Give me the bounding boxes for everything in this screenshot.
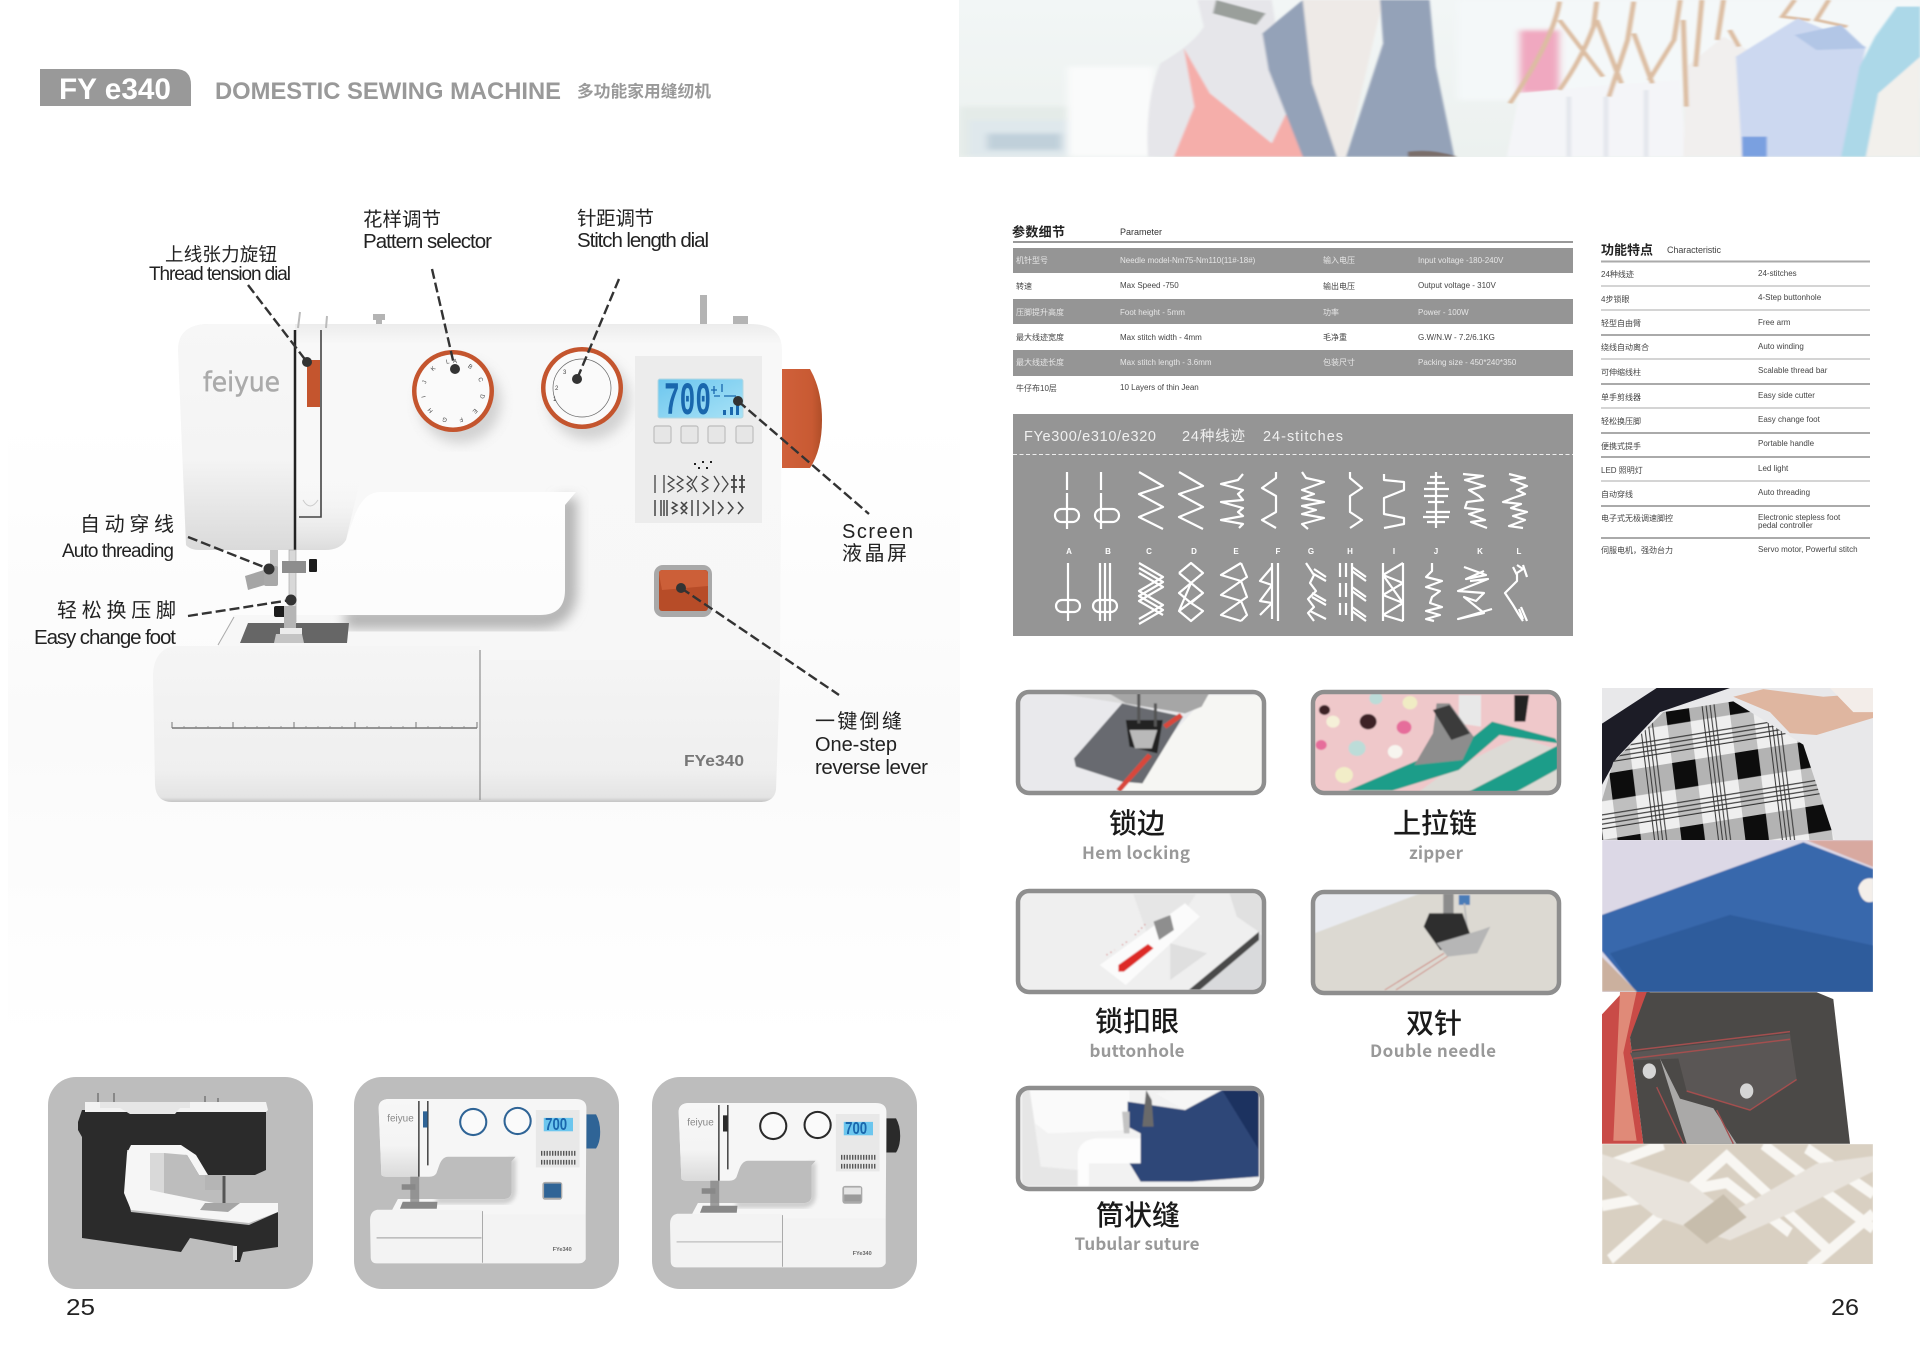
row: needle: 输入电压 [1323,255,1355,265]
row: stitch length: 包装尺寸 [1323,357,1355,367]
black shell [78,1110,278,1262]
row: foot height: Foot height - 5mm [1120,308,1185,317]
parameter table [1012,224,1573,393]
row: stitch width: 最大线迹宽度 [1016,332,1064,342]
characteristics rows: 24种线迹 [1601,269,1634,279]
lcd status icons [711,384,736,396]
characteristics rows: 伺服电机，强劲台力 [1601,545,1673,555]
characteristics rows: Easy side cutter [1758,391,1815,400]
caption: buttonhole: buttonhole [1090,1037,1185,1062]
blue shirts [1736,18,1866,157]
callout: auto threading: 自动穿线 [80,513,174,536]
characteristics heading: 功能特点 [1601,242,1653,258]
photo: blue fabric [1602,840,1873,993]
characteristics rows: 4-Step buttonhole [1758,293,1822,302]
bottom row of stitches [1056,563,1527,624]
stitch length dial: 3 [563,370,567,376]
photo: tubular suture [1016,1086,1264,1191]
lcd signal bars [723,402,739,415]
lcd reading: 700 [664,376,711,428]
needle bar [205,1175,222,1190]
callout: pattern selector: 花样调节 [363,209,441,231]
callout: auto threading [62,513,274,574]
caption: zipper: zipper [1409,839,1464,864]
callout: reverse lever: One-step [815,734,897,756]
collar band [1213,0,1266,25]
caption: tubular suture: 筒状缝 [1096,1194,1180,1234]
characteristics rows: 自动穿线 [1601,489,1633,499]
stitch letters: H [1347,547,1353,556]
title: DOMESTIC SEWING MACHINE [215,78,561,105]
mannequin [1147,0,1284,156]
table row stripes [1013,248,1573,376]
stitch length dial: 2 [555,386,559,392]
characteristics rows: 单手剪线器 [1601,392,1641,402]
characteristics table [1601,242,1870,555]
reverse lever [654,565,712,617]
characteristics rows: 轻松换压脚 [1601,416,1641,426]
stitch letters: E [1233,547,1239,556]
callout: thread tension dial [149,244,312,367]
characteristics rows: 可伸缩线柱 [1601,367,1641,377]
row: foot height: 压脚提升高度 [1016,307,1064,317]
stitch panel heading: 24-stitches [1263,429,1343,445]
callout: auto threading: Auto threading [62,541,174,562]
callout: screen: Screen [842,521,913,543]
row: stitch width: G.W/N.W - 7.2/6.1KG [1418,333,1495,342]
characteristics rows: Servo motor, Powerful stitch [1758,545,1858,554]
characteristics rows: 便携式提手 [1601,441,1641,451]
row: jean layers: 牛仔布10层 [1016,383,1057,393]
row: jean layers [1016,383,1199,393]
characteristics rows: Electronic stepless foot [1758,513,1841,522]
row: stitch length [1016,357,1517,367]
hangers [1510,0,1847,107]
top pins [373,295,748,326]
callout: stitch length dial [572,208,709,384]
callout: screen: 液晶屏 [842,542,907,565]
pattern dial [412,350,494,432]
thumbnail: black trim machine [652,1077,917,1289]
sewing plate [200,1203,240,1212]
stitch letters [1066,547,1522,556]
ground shadow [168,803,768,809]
characteristics rows: 24-stitches [1758,269,1797,278]
caption: hem locking [1082,802,1190,864]
model badge: FY e340 [59,73,171,106]
stitch panel heading: 24种线迹 [1182,428,1245,445]
pink top [1174,48,1306,157]
stitch letters: F [1276,547,1281,556]
needle assembly [245,550,317,643]
caption: buttonhole [1090,1000,1185,1062]
row: needle: Needle model-Nm75-Nm110(11#-18#) [1120,256,1256,265]
row: stitch width [1016,332,1495,342]
row: stitch length: Max stitch length - 3.6mm [1120,358,1212,367]
thumbnail: blue machine: FYe340 [553,1247,572,1253]
characteristics rows: Portable handle [1758,439,1815,448]
row: speed: 输出电压 [1323,281,1355,291]
photo: zipper [1312,690,1561,795]
photo: plaid skirt [1602,688,1873,841]
caption: tubular suture: Tubular suture [1074,1230,1200,1255]
logo: feiyue [203,367,280,398]
photo: quilted fabric [1602,1144,1873,1270]
callout: screen [733,396,913,565]
dial shadows [419,358,630,443]
blouse [1303,0,1383,157]
characteristics rows: 电子式无极调速脚控 [1601,513,1673,523]
white frame around opening [124,1145,278,1223]
photo: hem locking [1016,690,1266,795]
top banner photo: boutique clothes [959,0,1920,157]
row: speed: Max Speed -750 [1120,281,1179,290]
characteristics rows: Free arm [1758,318,1791,327]
characteristics rows: Easy change foot [1758,415,1821,424]
page number 26: 26 [1831,1294,1859,1320]
jacket [1262,0,1337,157]
parameter heading [1012,224,1573,243]
row: jean layers: 10 Layers of thin Jean [1120,383,1199,392]
stitch letters: G [1308,547,1314,556]
body and pillar [178,324,782,660]
row: stitch width: 毛净重 [1323,332,1347,342]
stitch chart panel [1013,414,1573,636]
row: foot height: Power - 100W [1418,308,1469,317]
thread cover [295,312,327,550]
callout: reverse lever: 一键倒缝 [815,710,902,733]
characteristics rules [1601,262,1870,538]
stitch panel heading [1024,428,1343,445]
thumbnail: black trim machine: FYe340 [853,1251,872,1257]
head shading [178,324,295,550]
stitch letters: K [1477,547,1483,556]
row: needle: Input voltage -180-240V [1418,256,1504,265]
characteristics heading: Characteristic [1667,245,1722,255]
stitch letters: D [1191,547,1197,556]
window inner shade [345,498,567,619]
characteristics heading [1601,242,1722,258]
callout: easy change foot: 轻松换压脚 [57,599,176,622]
thumbnail: blue machine [354,1077,619,1289]
base unit [153,643,780,802]
row: speed: 转速 [1016,281,1032,291]
thumbnail: blue machine: 700 [545,1114,567,1134]
callout: reverse lever [676,583,928,779]
callout: easy change foot [34,594,296,649]
handwheel [782,369,822,468]
stitch letters: C [1146,547,1152,556]
stitch letters: L [1517,547,1522,556]
row: stitch length: Packing size - 450*240*350 [1418,358,1517,367]
characteristics rows: Auto threading [1758,488,1810,497]
thumbnail: black trim machine: feiyue [687,1118,714,1129]
stitch panel heading: FYe300/e310/e320 [1024,429,1156,445]
characteristics rows: Scalable thread bar [1758,366,1828,375]
title: 多功能家用缝纫机 [577,81,712,101]
callout: thread tension dial: Thread tension dial [149,264,291,285]
row: stitch length: 最大线迹长度 [1016,357,1064,367]
row: foot height [1016,307,1469,317]
panel buttons [654,426,753,443]
row: needle: 机针型号 [1016,255,1048,265]
caption: buttonhole: 锁扣眼 [1095,1000,1179,1040]
white shirts [1507,80,1686,157]
main sewing machine [154,287,858,802]
stitch letters: B [1105,547,1111,556]
caption: zipper [1393,802,1477,864]
sewing plate and deck [218,617,349,645]
callout: pattern selector: Pattern selector [363,230,492,253]
characteristics rows: pedal controller [1758,521,1813,530]
speed dots [694,462,712,468]
control panel [635,356,762,523]
page number 25: 25 [66,1294,95,1320]
callout: pattern selector [363,209,492,374]
row: foot height: 功率 [1323,307,1339,317]
characteristics rows: 4步锁眼 [1601,294,1629,304]
characteristics rows: Led light [1758,464,1789,473]
characteristics rows: 轻型自由臂 [1601,318,1641,328]
caption: zipper: 上拉链 [1393,802,1477,842]
characteristics rows: LED 照明灯 [1601,465,1643,475]
row: stitch width: Max stitch width - 4mm [1120,333,1202,342]
callout: easy change foot: Easy change foot [34,626,176,649]
row: speed: Output voltage - 310V [1418,281,1496,290]
left page soft floor background [8,420,960,1040]
arm underside shading [295,480,360,550]
callout: stitch length dial: Stitch length dial [577,229,709,252]
thumbnail: black trim machine: 700 [845,1118,867,1138]
characteristics rows [1601,269,1858,555]
parameter heading: Parameter [1120,227,1162,237]
stitch chart on machine [655,475,745,516]
pattern dial: A B C D E F G H I J K L [421,358,485,422]
callout: stitch length dial: 针距调节 [577,208,654,230]
thumbnail: black machine [48,1077,313,1289]
characteristics rows: Auto winding [1758,342,1804,351]
white top cap [85,1102,268,1112]
caption: double needle [1370,1002,1496,1062]
top row of stitches [1055,472,1527,529]
caption: hem locking: Hem locking [1082,839,1190,864]
callout: reverse lever: reverse lever [815,756,928,779]
photo: double needle [1312,890,1561,995]
stitch letters: J [1434,547,1438,556]
model badge [40,69,191,106]
stitch length dial: 1 [553,397,557,403]
thumbnail: blue machine: feiyue [387,1114,414,1125]
parameter heading: 参数细节 [1012,224,1065,240]
caption: tubular suture [1074,1194,1200,1255]
ruler [172,722,477,728]
caption: double needle: 双针 [1406,1002,1462,1042]
photo: denim jacket [1602,991,1873,1145]
row: needle [1016,255,1504,265]
photo: buttonhole [1016,889,1266,994]
callout: thread tension dial: 上线张力旋钮 [165,244,277,265]
characteristics rows: 绕线自动离合 [1601,342,1649,352]
caption: hem locking: 锁边 [1109,802,1165,842]
caption: double needle: Double needle [1370,1037,1496,1062]
model mark: FYe340 [684,753,744,770]
stitch letters: A [1066,547,1072,556]
stitch length dial [541,347,623,429]
row: speed [1016,281,1496,291]
stitch letters: I [1393,547,1395,556]
